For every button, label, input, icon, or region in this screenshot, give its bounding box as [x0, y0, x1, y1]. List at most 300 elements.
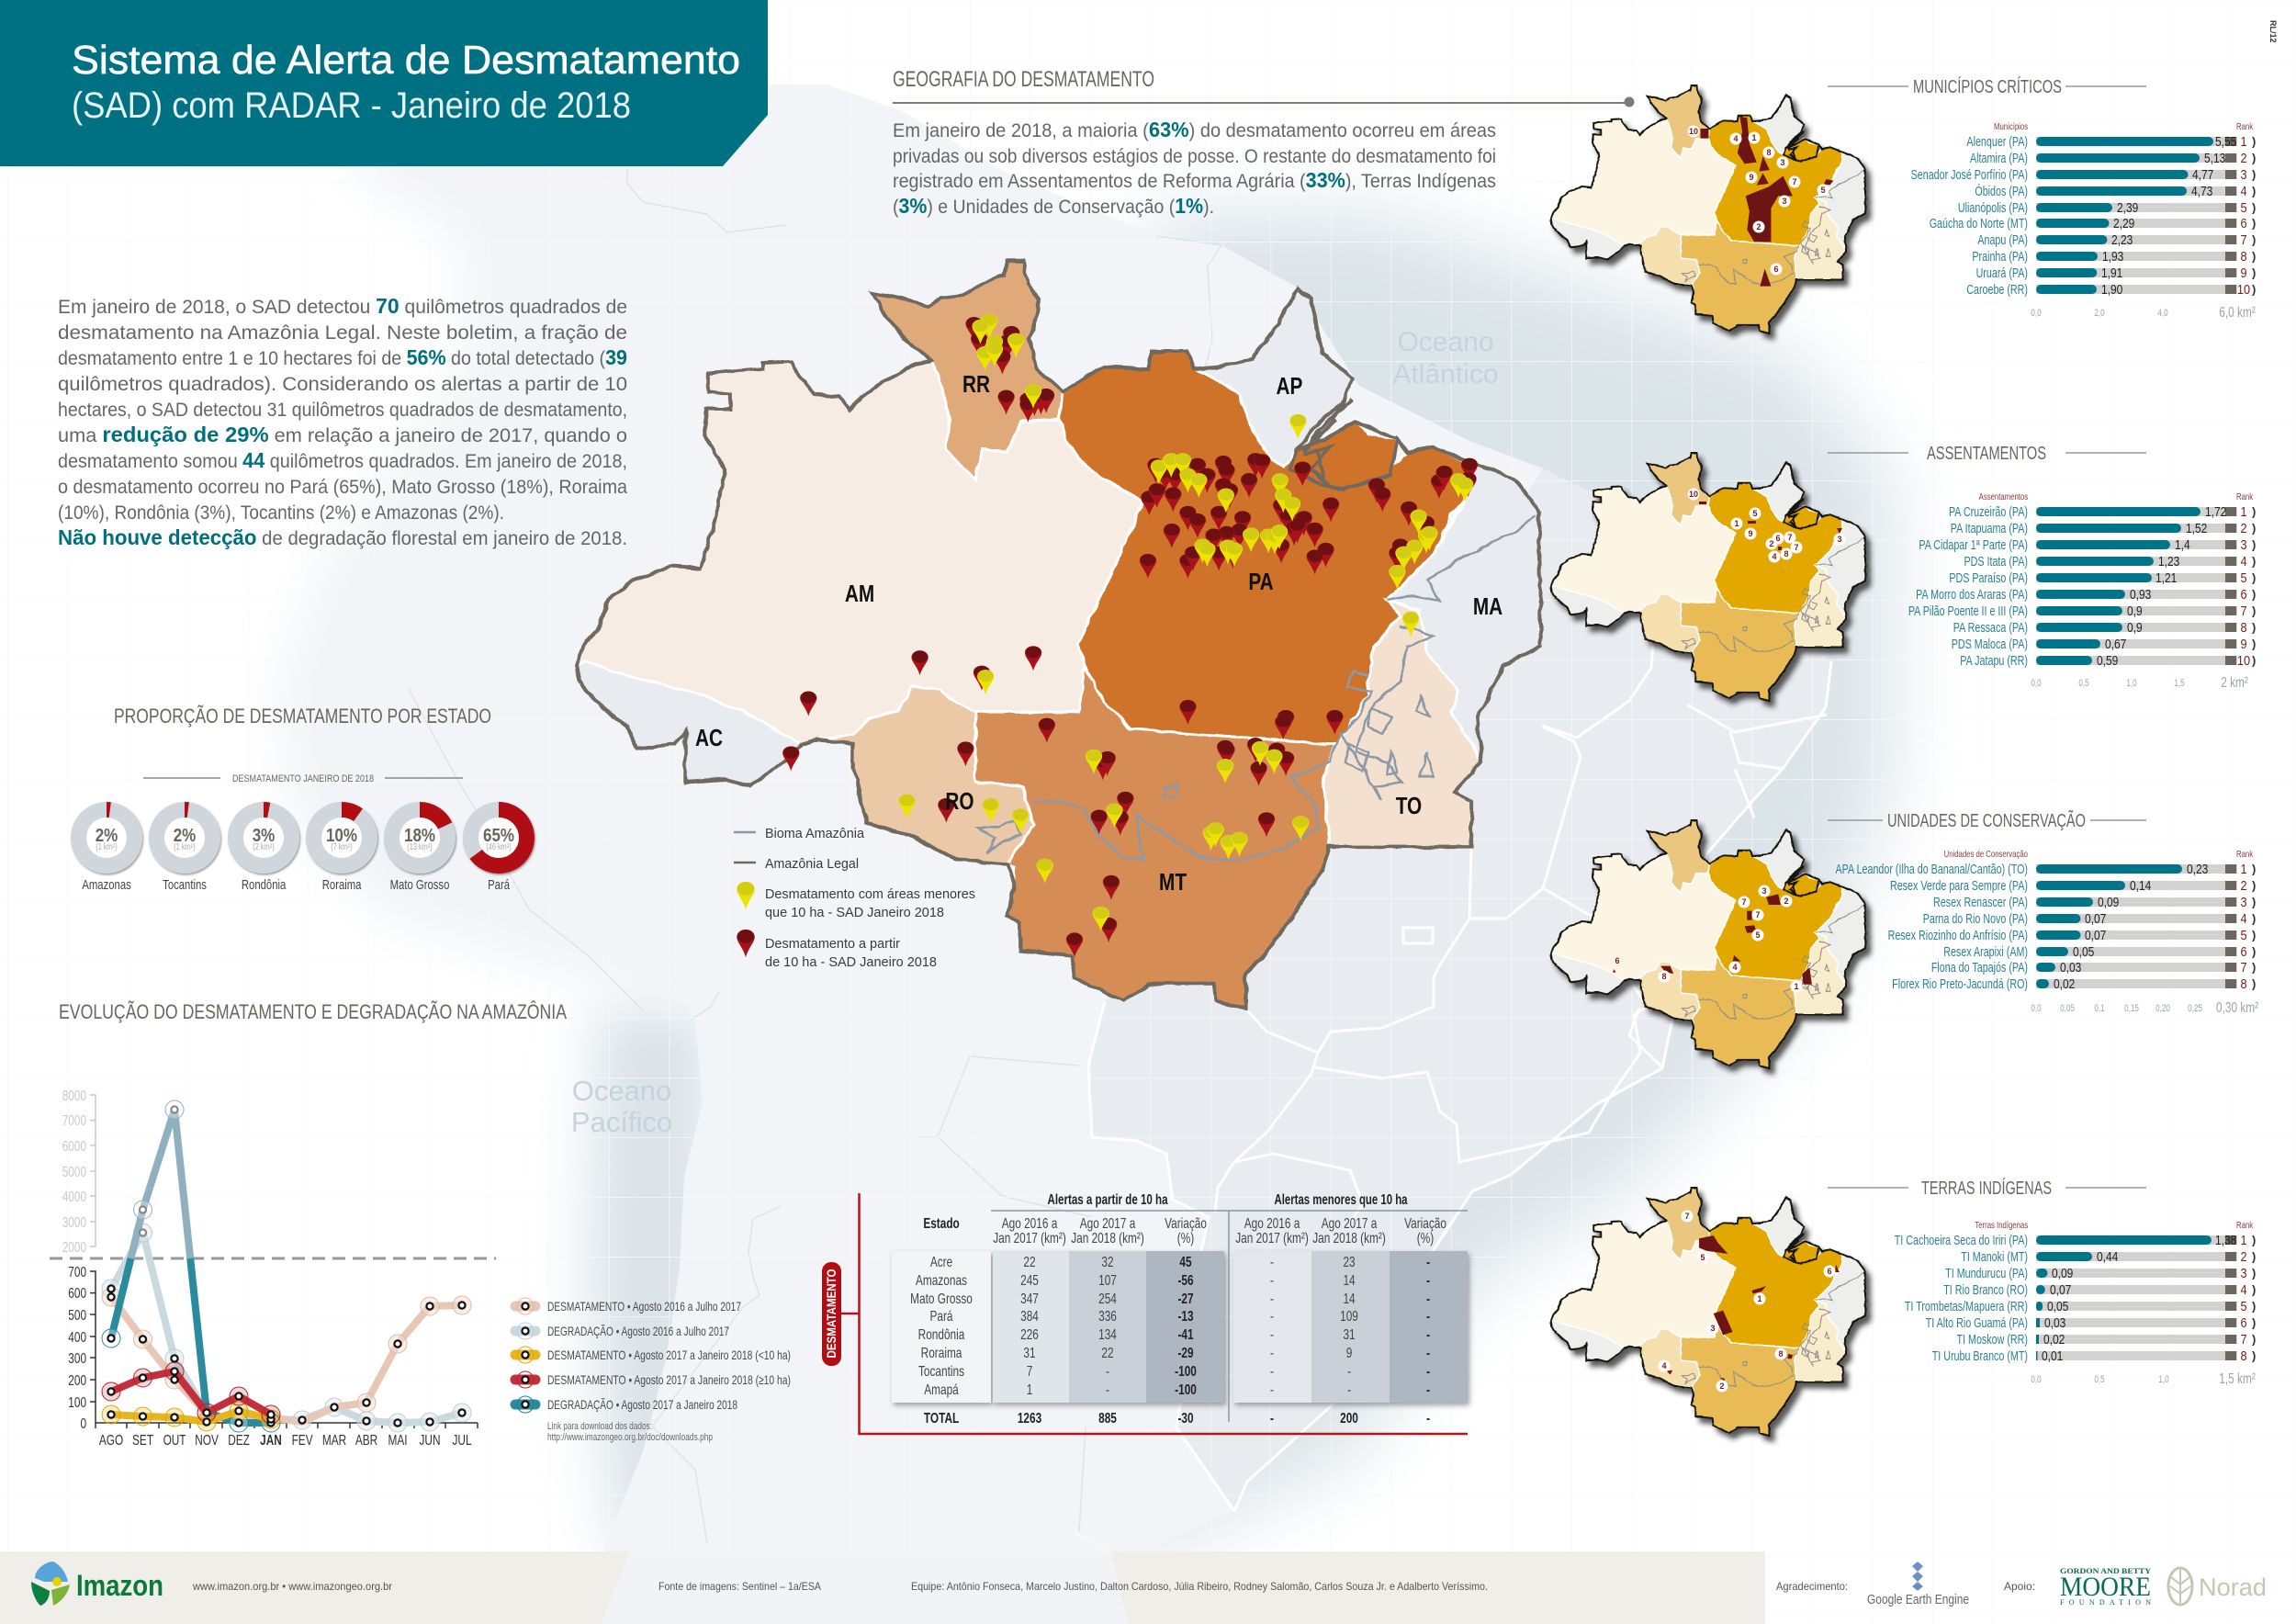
table group headers: Alertas a partir de 10 ha	[1047, 1192, 1168, 1208]
logo: Google Earth Engine	[1867, 1562, 1969, 1607]
table group headers	[1047, 1192, 1408, 1208]
row: Caroebe: 10	[2237, 281, 2250, 297]
row: Senador José Porfírio	[1911, 166, 2256, 182]
row: PA Itapuama: 2	[2240, 520, 2247, 536]
text block: summary paragraph: o desmatamento ocorreu no Pará (65%), Mato Grosso (18%), Roraima	[58, 477, 627, 498]
footer: acknowledgement: Agradecimento:	[1776, 1580, 1848, 1593]
row: Florex Rio Preto-Jacundá	[1892, 976, 2256, 991]
panel: deforestation table	[822, 1192, 1468, 1434]
row: Óbidos: Óbidos (PA)	[1975, 183, 2028, 198]
land: eastern Brazil	[1088, 468, 1831, 1511]
row: Senador José Porfírio: 4,77	[2192, 167, 2213, 182]
map legend: Desmatamento a partir	[765, 936, 900, 952]
row: Parna do Rio Novo: 0,07	[2085, 911, 2106, 926]
donut: Rondônia: (2 km²)	[253, 841, 275, 851]
text block: summary paragraph: desmatamento somou 44 quilômetros quadrados. Em janeiro de 2018,	[58, 448, 627, 472]
lower axis: 200	[68, 1371, 86, 1388]
table column: Aug 2016 to Jan 2017, under 10 ha: -	[1270, 1307, 1274, 1324]
row: Prainha: 8	[2240, 248, 2247, 264]
row: Altamira: 2	[2240, 150, 2247, 165]
row: TI Alto Rio Guamá: TI Alto Rio Guamá (PA)	[1926, 1314, 2028, 1330]
data link: Link para download dos dados:	[547, 1421, 652, 1432]
map legend: Bioma Amazônia	[765, 826, 865, 841]
column captions	[1975, 1220, 2253, 1230]
upper axis	[62, 1087, 96, 1255]
table column: state names: Amazonas	[916, 1271, 967, 1288]
row: Resex Renascer: 0,09	[2098, 895, 2119, 909]
table column headers: Ago 2016 a	[1002, 1214, 1057, 1231]
axis labels: 0,05	[2060, 1003, 2075, 1014]
row: PA Jatapu: 0,59	[2097, 653, 2118, 668]
chart legend	[515, 1298, 791, 1443]
row: PA Ressaca: PA Ressaca (PA)	[1953, 619, 2028, 635]
row: Uruará: 1,91	[2101, 265, 2122, 280]
heading: evolution chart: EVOLUÇÃO DO DESMATAMENTO E DEGRADAÇÃO NA AMAZÔNIA	[59, 1000, 567, 1023]
row: PA Pilão Poente	[1908, 603, 2256, 618]
row: TI Manoki: 2	[2240, 1248, 2247, 1264]
row: Alenquer	[1966, 133, 2256, 149]
row: Resex Renascer: Resex Renascer (PA)	[1933, 894, 2028, 909]
row: TI Cachoeira Seca do Iriri: TI Cachoeira Seca do Iriri (PA)	[1895, 1232, 2028, 1247]
row: PDS Itata: 1,23	[2158, 554, 2179, 569]
months: SET	[132, 1431, 153, 1448]
header banner	[0, 0, 768, 166]
corner code: RL/12	[2268, 20, 2278, 43]
months: FEV	[292, 1431, 313, 1448]
row: TI Alto Rio Guamá: 0,03	[2044, 1315, 2065, 1330]
axis labels: 6,0 km²	[2219, 303, 2256, 320]
text block: summary paragraph: (10%), Rondônia (3%), Tocantins (2%) e Amazonas (2%).	[58, 502, 504, 524]
months	[99, 1431, 472, 1448]
mini map: settlements	[1550, 453, 1865, 701]
row: Flona do Tapajós: 7	[2240, 959, 2247, 975]
row: Gaúcha do Norte	[1930, 215, 2256, 231]
mini map: conservation units: 5	[1755, 930, 1761, 940]
donut: Amazonas: (1 km²)	[96, 841, 118, 851]
row: TI Urubu Branco: 8	[2240, 1348, 2247, 1363]
table column: state names: Rondônia	[918, 1325, 964, 1342]
column captions: Municípios	[1994, 121, 2028, 131]
text block: geography paragraph	[893, 118, 1496, 218]
row: TI Trombetas/Mapuera: TI Trombetas/Mapuera (RR)	[1905, 1298, 2028, 1314]
mini map: municipalities: 6	[1773, 265, 1779, 274]
text block: summary paragraph: desmatamento na Amazônia Legal. Neste boletim, a fração de	[58, 322, 627, 344]
mini map: settlements: 9	[1748, 529, 1753, 538]
row: TI Manoki: 0,44	[2097, 1249, 2119, 1264]
row: Anapu: Anapu (PA)	[1977, 231, 2028, 247]
mini map: settlements: 7	[1787, 533, 1793, 542]
series: degradation 2016-2017	[102, 1224, 471, 1432]
months: JUN	[419, 1431, 441, 1448]
row: Prainha: 1,93	[2102, 249, 2123, 264]
row: PA Cruzeirão: 1	[2240, 503, 2247, 519]
heading: UNIDADES DE CONSERVAÇÃO	[1887, 809, 2086, 831]
table column headers: Variação	[1165, 1214, 1207, 1231]
legend item: degradation 2017-2018	[515, 1396, 737, 1413]
table column: Aug 2017 to Jan 2018, under 10 ha: 31	[1343, 1325, 1356, 1342]
state polygons and borders	[576, 261, 1541, 1009]
mini map: municipalities: 9	[1749, 173, 1754, 182]
row: APA Leandor	[1836, 861, 2256, 876]
row: PA Itapuama: 1,52	[2186, 521, 2207, 536]
mini map: municipalities: 10	[1689, 127, 1698, 136]
footer: websites: www.imazon.org.br • www.imazongeo.org.br	[192, 1580, 392, 1593]
row: PA Ressaca: 8	[2240, 619, 2247, 635]
table column: Aug 2017 to Jan 2018, from 10 ha: 107	[1098, 1271, 1117, 1288]
table column: Aug 2017 to Jan 2018, from 10 ha: 22	[1101, 1344, 1114, 1360]
row: Caroebe	[1966, 281, 2256, 297]
donut: Amazonas: Amazonas	[82, 877, 131, 892]
table column: Aug 2016 to Jan 2017, from 10 ha: 31	[1023, 1344, 1036, 1360]
column captions: Rank	[2236, 1220, 2253, 1230]
donut: Pará: Pará	[488, 877, 511, 892]
row: PDS Itata: PDS Itata (PA)	[1964, 553, 2028, 569]
upper axis: 5000	[62, 1163, 86, 1179]
mini map: settlements: 8	[1784, 549, 1789, 558]
mini map: municipalities: 2	[1756, 222, 1761, 231]
donut: Amazonas: 2%	[96, 825, 118, 845]
donut: Pará	[463, 802, 535, 892]
table column: state names: Mato Grosso	[910, 1290, 973, 1306]
table column: Aug 2017 to Jan 2018, under 10 ha: 14	[1343, 1290, 1356, 1306]
row: Óbidos: 4,73	[2191, 184, 2212, 198]
table column headers: (%)	[1417, 1229, 1434, 1246]
table column headers: Ago 2017 a	[1080, 1214, 1135, 1231]
legend item: deforestation 2016-2017	[515, 1298, 741, 1314]
table column: Aug 2016 to Jan 2017, from 10 ha	[1018, 1253, 1041, 1426]
row: TI Rio Branco: TI Rio Branco (RO)	[1943, 1281, 2028, 1297]
months: DEZ	[228, 1431, 250, 1448]
row: TI Rio Branco: 4	[2240, 1281, 2247, 1297]
table group headers: Alertas menores que 10 ha	[1275, 1192, 1408, 1208]
map legend: que 10 ha - SAD Janeiro 2018	[765, 905, 944, 920]
row: Resex Riozinho do Anfrísio	[1888, 927, 2256, 942]
data point markers	[107, 1106, 466, 1427]
map pins: deforestation under 10 ha	[898, 313, 1473, 931]
row: Senador José Porfírio: Senador José Porfírio (PA)	[1911, 166, 2028, 182]
months: AGO	[99, 1431, 123, 1448]
panel: settlements	[1550, 444, 2256, 701]
donut: Mato Grosso: 18%	[404, 825, 435, 845]
table column headers: Ago 2016 a	[1244, 1214, 1300, 1231]
table column: Aug 2017 to Jan 2018, from 10 ha: 254	[1098, 1290, 1117, 1306]
row: Resex Riozinho do Anfrísio: 0,07	[2085, 928, 2106, 942]
lower axis: 100	[68, 1393, 86, 1410]
row: Ulianópolis: 5	[2240, 199, 2247, 215]
mini map: municipalities: 4	[1733, 134, 1739, 143]
bar chart rows	[1895, 1232, 2256, 1363]
table column headers: (%)	[1177, 1229, 1194, 1246]
label: Atlantic Ocean: Oceano	[1397, 327, 1494, 357]
row: TI Moskow	[1957, 1331, 2256, 1347]
row: PDS Paraíso: 5	[2240, 570, 2247, 585]
table column: Aug 2017 to Jan 2018, under 10 ha: 200	[1340, 1409, 1358, 1426]
mini map: conservation units: 4	[1732, 963, 1738, 972]
pill: DESMATAMENTO: DESMATAMENTO	[825, 1269, 838, 1358]
row: Alenquer: 1	[2240, 133, 2247, 149]
map legend: de 10 ha - SAD Janeiro 2018	[765, 954, 937, 970]
mini map: indigenous lands	[1550, 1188, 1865, 1436]
table column: Aug 2017 to Jan 2018, from 10 ha: 885	[1098, 1409, 1117, 1426]
row: Ulianópolis: 2,39	[2117, 200, 2138, 215]
axis labels: 1,5	[2174, 678, 2185, 689]
text block: summary paragraph: uma redução de 29% em relação a janeiro de 2017, quando o	[58, 423, 627, 446]
mini map: settlements: 1	[1734, 519, 1739, 528]
mini map: indigenous lands: 3	[1710, 1324, 1716, 1333]
row: Florex Rio Preto-Jacundá: Florex Rio Preto-Jacundá (RO)	[1892, 976, 2028, 991]
donut: Pará: 65%	[483, 825, 514, 845]
table column: variation, under 10 ha	[1426, 1253, 1430, 1426]
text block: geography heading: GEOGRAFIA DO DESMATAMENTO	[893, 67, 1154, 92]
row: APA Leandor: APA Leandor (Ilha do Bananal/Cantão) (TO)	[1836, 861, 2028, 876]
table column headers: Jan 2017 (km²)	[993, 1229, 1066, 1246]
state labels: AM	[845, 581, 874, 607]
row: Resex Renascer: 3	[2240, 894, 2247, 909]
donut: Mato Grosso: Mato Grosso	[390, 877, 449, 892]
row: Prainha: Prainha (PA)	[1972, 248, 2028, 264]
table column: Aug 2017 to Jan 2018, from 10 ha: 32	[1101, 1253, 1114, 1269]
label: Pacific Ocean: Pacífico	[571, 1106, 672, 1138]
donut: Tocantins	[149, 802, 220, 892]
footer logo: Imazon: Imazon	[76, 1569, 163, 1602]
row: Florex Rio Preto-Jacundá: 8	[2240, 976, 2247, 991]
heading: ASSENTAMENTOS	[1927, 444, 2046, 464]
table column: variation, under 10 ha: -	[1426, 1344, 1430, 1360]
row: Flona do Tapajós: 0,03	[2060, 960, 2081, 975]
title: Sistema de Alerta de Desmatamento	[72, 38, 740, 83]
table column headers	[923, 1214, 1446, 1246]
text block: geography paragraph: Em janeiro de 2018, a maioria (63%) do desmatamento ocorreu em áreas	[893, 118, 1496, 141]
axis labels: 2,0	[2094, 308, 2105, 319]
table column: Aug 2016 to Jan 2017, under 10 ha: -	[1270, 1362, 1274, 1379]
mini map: settlements: 3	[1837, 535, 1842, 544]
row: Florex Rio Preto-Jacundá: 0,02	[2054, 976, 2075, 991]
row: PDS Maloca: 9	[2240, 636, 2247, 651]
table column: state names: TOTAL	[924, 1409, 960, 1426]
row: Senador José Porfírio: 3	[2240, 166, 2247, 182]
mini map: conservation units: 2	[1784, 897, 1789, 906]
row: PA Pilão Poente: PA Pilão Poente II e III (PA)	[1908, 603, 2028, 618]
table column: variation, under 10 ha: -	[1426, 1271, 1430, 1288]
row: TI Urubu Branco	[1932, 1348, 2256, 1363]
state labels: MT	[1159, 869, 1187, 896]
row: PDS Itata	[1964, 553, 2256, 569]
table column: state names: Tocantins	[918, 1362, 964, 1379]
axis labels: 0,0	[2031, 1003, 2042, 1014]
state labels: PA	[1248, 569, 1274, 595]
axis labels	[2031, 673, 2248, 690]
row: TI Urubu Branco: 0,01	[2042, 1348, 2063, 1363]
row: PA Cruzeirão: PA Cruzeirão (PA)	[1949, 503, 2028, 519]
table column: Aug 2017 to Jan 2018, from 10 ha: 336	[1098, 1307, 1117, 1324]
series: deforestation 2016-2017	[102, 1288, 471, 1422]
table column: variation, from 10 ha: -41	[1177, 1325, 1194, 1342]
row: Caroebe: Caroebe (RR)	[1966, 281, 2028, 297]
months: NOV	[195, 1431, 219, 1448]
row: PA Cidapar	[1919, 536, 2256, 552]
main map: Legal Amazon by state	[576, 261, 1541, 1009]
mini map: conservation units: 3	[1761, 886, 1767, 896]
table column: Aug 2016 to Jan 2017, from 10 ha: 7	[1027, 1362, 1032, 1379]
map legend	[734, 826, 975, 970]
row: Óbidos: 4	[2240, 183, 2247, 198]
mini map: conservation units: 6	[1615, 956, 1620, 965]
mini map: indigenous lands: 5	[1700, 1253, 1705, 1262]
table column backgrounds	[892, 1251, 1468, 1403]
heading: MUNICÍPIOS CRÍTICOS	[1913, 76, 2062, 97]
donut: Mato Grosso: (13 km²)	[407, 841, 433, 851]
table column: Aug 2017 to Jan 2018, from 10 ha: 134	[1098, 1325, 1117, 1342]
row: PA Jatapu	[1960, 652, 2256, 668]
footer: support: Apoio:	[2004, 1580, 2035, 1593]
map legend: Desmatamento com áreas menores	[765, 886, 975, 902]
mini map: conservation units: 7	[1741, 897, 1747, 907]
row: PA Ressaca	[1953, 619, 2256, 635]
table column: variation, under 10 ha: -	[1426, 1362, 1430, 1379]
footer: team: Equipe: Antônio Fonseca, Marcelo Justino, Dalton Cardoso, Júlia Ribeiro, Rodney Salomão, Carlos Souza Jr. e Adalberto Veríssimo.	[911, 1580, 1488, 1593]
heading: proportion by state: PROPORÇÃO DE DESMATAMENTO POR ESTADO	[114, 705, 491, 727]
axis labels: 0,1	[2094, 1003, 2105, 1014]
months: OUT	[163, 1431, 186, 1448]
table column headers: Ago 2017 a	[1322, 1214, 1377, 1231]
mini map: settlements: 5	[1752, 509, 1758, 518]
row: Resex Verde para Sempre: 0,14	[2130, 878, 2152, 893]
row: PA Cruzeirão	[1949, 503, 2256, 519]
pill: DESMATAMENTO	[822, 1262, 841, 1366]
panel: critical municipalities	[1550, 76, 2256, 333]
mini map: municipalities: 3	[1782, 197, 1787, 206]
axis labels: 1,5 km²	[2219, 1370, 2256, 1386]
legend item: deforestation 2016-2017: DESMATAMENTO • Agosto 2016 a Julho 2017	[547, 1299, 741, 1314]
state labels	[695, 371, 1503, 896]
row: Gaúcha do Norte: 6	[2240, 215, 2247, 231]
row: Flona do Tapajós	[1931, 959, 2256, 975]
row: Uruará: 9	[2240, 265, 2247, 280]
mini map: settlements: 7	[1794, 543, 1799, 552]
mini map: settlements: 2	[1769, 539, 1774, 548]
row: Ulianópolis	[1958, 199, 2256, 215]
mini map: indigenous lands: 1	[1757, 1294, 1762, 1303]
table column: variation, from 10 ha: -100	[1175, 1362, 1197, 1379]
data link	[547, 1421, 713, 1443]
text block: geography heading	[893, 67, 1635, 107]
row: Resex Verde para Sempre: Resex Verde para Sempre (PA)	[1890, 877, 2028, 893]
table column: state names: Amapá	[924, 1381, 959, 1397]
series: deforestation from 10 ha	[102, 1362, 280, 1424]
mini map: municipalities: 3	[1780, 158, 1785, 167]
footer logo: Imazon	[31, 1562, 163, 1606]
mini map: municipalities: 1	[1751, 133, 1757, 142]
text block: geography paragraph: registrado em Assentamentos de Reforma Agrária (33%), Terras Indígenas	[893, 168, 1496, 192]
lower axis	[68, 1263, 478, 1431]
row: Flona do Tapajós: Flona do Tapajós (PA)	[1931, 959, 2028, 975]
label: Atlantic Ocean: Atlântico	[1392, 359, 1499, 389]
axis labels: 0,5	[2094, 1374, 2105, 1385]
table column: Aug 2016 to Jan 2017, from 10 ha: 1	[1027, 1381, 1032, 1397]
row: TI Munduruku: 3	[2240, 1265, 2247, 1280]
axis labels: 4,0	[2157, 308, 2168, 319]
months: JAN	[260, 1431, 282, 1448]
logo: Norad: Norad	[2199, 1573, 2267, 1601]
footer: image source: Fonte de imagens: Sentinel – 1a/ESA	[658, 1580, 821, 1593]
table column: Aug 2017 to Jan 2018, from 10 ha	[1098, 1253, 1117, 1426]
table column: variation, under 10 ha: -	[1426, 1290, 1430, 1306]
table column: Aug 2016 to Jan 2017, from 10 ha: 347	[1020, 1290, 1039, 1306]
mini map: indigenous lands: 2	[1719, 1382, 1725, 1391]
table column: variation, from 10 ha	[1175, 1253, 1197, 1426]
column captions: Terras Indígenas	[1975, 1220, 2028, 1230]
upper axis: 2000	[62, 1238, 86, 1255]
row: Caroebe: 1,90	[2101, 282, 2123, 297]
row: PA Itapuama: PA Itapuama (PA)	[1951, 520, 2028, 536]
axis labels: 0,5	[2078, 678, 2089, 689]
mini map: settlements: 6	[1775, 534, 1781, 543]
row: PA Morro dos Araras: 0,93	[2130, 587, 2151, 602]
legend item: degradation 2017-2018: DEGRADAÇÃO • Agosto 2017 a Janeiro 2018	[547, 1397, 737, 1412]
donut: Roraima: (7 km²)	[331, 841, 353, 851]
state labels: TO	[1396, 793, 1422, 819]
upper axis: 7000	[62, 1111, 86, 1128]
map legend: Amazônia Legal	[765, 856, 859, 872]
axis labels	[2031, 998, 2258, 1015]
row: PA Pilão Poente: 0,9	[2127, 603, 2143, 618]
row: TI Moskow: TI Moskow (RR)	[1957, 1331, 2028, 1347]
table column: Aug 2017 to Jan 2018, under 10 ha: 23	[1343, 1253, 1356, 1269]
donut: Tocantins: (1 km²)	[174, 841, 196, 851]
table column: variation, under 10 ha: -	[1426, 1253, 1430, 1269]
axis labels: 0,30 km²	[2216, 998, 2258, 1015]
lower axis: 0	[80, 1415, 86, 1431]
row: Resex Verde para Sempre: 2	[2240, 877, 2247, 893]
row: TI Rio Branco	[1943, 1281, 2256, 1297]
series: degradation 2017-2018 upper part	[130, 1110, 190, 1258]
row: Parna do Rio Novo: 4	[2240, 910, 2247, 926]
months: MAR	[322, 1431, 346, 1448]
table column headers: Variação	[1404, 1214, 1446, 1231]
table column: state names: Roraima	[921, 1344, 962, 1360]
axis labels: 0,20	[2155, 1003, 2170, 1014]
text block: summary paragraph: hectares, o SAD detectou 31 quilômetros quadrados de desmatamento,	[58, 400, 627, 421]
column captions	[1979, 491, 2253, 502]
table column: Aug 2017 to Jan 2018, under 10 ha: 109	[1340, 1307, 1358, 1324]
row: TI Munduruku: TI Mundurucu (PA)	[1945, 1265, 2028, 1280]
table column: Aug 2017 to Jan 2018, under 10 ha: 9	[1346, 1344, 1352, 1360]
text block: geography paragraph: (3%) e Unidades de Conservação (1%).	[893, 194, 1214, 218]
table column: Aug 2017 to Jan 2018, under 10 ha: 14	[1343, 1271, 1356, 1288]
row: Óbidos	[1975, 183, 2256, 198]
row: Parna do Rio Novo: Parna do Rio Novo (PA)	[1923, 910, 2028, 926]
row: PA Ressaca: 0,9	[2127, 620, 2143, 635]
months: ABR	[355, 1431, 377, 1448]
months: JUL	[453, 1431, 472, 1448]
row: TI Manoki: TI Manoki (MT)	[1961, 1248, 2028, 1264]
row: TI Manoki	[1961, 1248, 2256, 1264]
lower axis: 700	[68, 1263, 86, 1280]
row: Anapu: 2,23	[2111, 232, 2133, 247]
row: PA Pilão Poente: 7	[2240, 603, 2247, 618]
row: Resex Arapixi: 6	[2240, 943, 2247, 959]
row: PDS Paraíso: 1,21	[2155, 570, 2177, 585]
donut: Rondônia: Rondônia	[242, 877, 287, 892]
logo: Google Earth Engine: Google Earth Engine	[1867, 1592, 1969, 1607]
legend item: deforestation under 10 ha	[515, 1347, 791, 1363]
column captions	[1944, 849, 2253, 859]
mini map: settlements: 4	[1772, 552, 1777, 561]
label: Atlantic Ocean	[1392, 327, 1499, 389]
table column: variation, under 10 ha: -	[1426, 1409, 1430, 1426]
state labels: AP	[1277, 373, 1302, 400]
column captions: Rank	[2236, 849, 2253, 859]
